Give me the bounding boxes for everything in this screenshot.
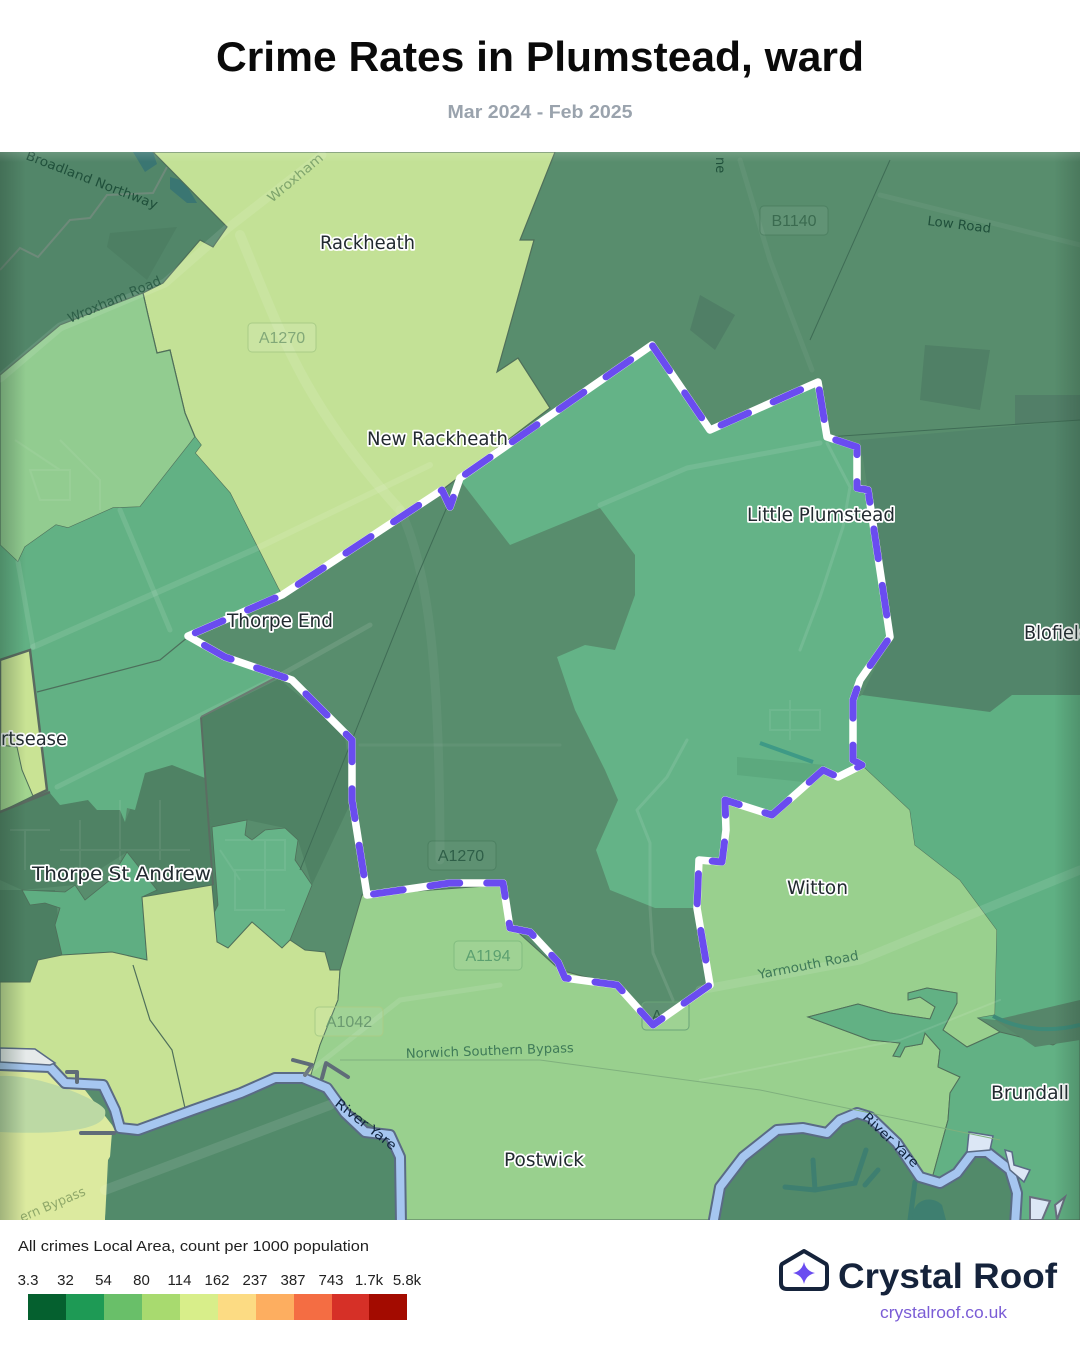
choropleth map: River Yare [332,1096,399,1154]
shield: B1140 [760,206,828,235]
shield: A1194 [454,941,522,970]
choropleth map: Wroxham Road [66,274,164,327]
choropleth map: Norwich Southern Bypass [406,1041,574,1062]
marina [967,1132,993,1152]
region: Rackheath (yellow-green) [143,152,555,595]
marsh channels [785,1150,915,1220]
choropleth map: New Rackheath [367,428,508,450]
legend tick labels: 54 [95,1272,112,1289]
logo: Crystal Roof [781,1251,1057,1322]
choropleth map: Postwick [504,1149,584,1171]
region: Thorpe (mid green) [0,437,282,822]
railway / thin lines [300,160,1080,1140]
region: lime south of river [0,1066,120,1220]
river Yare west and enclosed dark land [105,1132,120,1220]
choropleth map: Wroxham [265,151,327,206]
road labels: Broadland Northway [24,149,160,213]
icon: house with star [781,1251,827,1289]
road shields [248,206,828,1036]
shield: A1194: A1194 [465,948,511,965]
choropleth map: River Yare [859,1110,921,1171]
minor track in north-west [0,167,167,270]
title: Crime Rates in Plumstead, ward [216,33,864,80]
wordmark: Crystal Roof [838,1257,1057,1296]
region: Little Plumstead (mid green) [460,345,890,908]
region: west (light green) [0,293,195,562]
region: Brundall (mid green) [808,988,1080,1220]
legend tick labels: 743 [318,1272,344,1289]
legend tick labels [18,1272,422,1289]
choropleth map: Yarmouth Road [756,949,860,983]
woodland patches on dark areas [0,152,1080,982]
choropleth map: Low Road [927,214,992,237]
road network (faint) [0,155,1080,1190]
region: Witton and Postwick (light green) [310,765,1000,1220]
choropleth map: ern Bypass [18,1184,88,1226]
minor estate streets [10,700,821,911]
patch: Thorpe north [212,820,312,948]
choropleth map: Thorpe St Andrew [31,863,211,885]
region: Thorpe lower lime [0,885,340,1130]
shield: A1270 south: A1270 [438,848,484,865]
shield: A1270 north: A1270 [259,330,305,347]
shield: B1140: B1140 [771,213,817,230]
choropleth map: Witton [787,877,848,899]
choropleth map [0,149,1080,1226]
shield: A47: A [652,1008,663,1025]
region: Hartsease strip [0,650,47,812]
ward boundary: Plumstead [188,345,890,1025]
date range subtitle: Mar 2024 - Feb 2025 [448,101,632,122]
legend [18,1238,422,1320]
region: dark strip east [995,1000,1080,1047]
shield: A1270 north [248,323,316,352]
legend tick labels: 3.3 [18,1272,38,1289]
legend tick labels: 114 [168,1272,191,1289]
legend colour scale [28,1294,407,1320]
shield: A47 [642,1002,689,1030]
parish boundary line [37,637,188,692]
legend tick labels: 1.7k [355,1272,384,1289]
river outline [0,1060,1017,1225]
legend title: All crimes Local Area, count per 1000 population [18,1238,369,1255]
legend tick labels: 32 [57,1272,74,1289]
legend tick labels: 5.8k [393,1272,422,1289]
place labels: Rackheath [320,232,415,254]
shield: A1270 south [428,841,496,870]
choropleth map: ne [712,157,727,173]
shield: A1042: A1042 [326,1014,372,1031]
region: Blofield south (mid green) [853,695,1080,1020]
choropleth map: Brundall [991,1082,1069,1104]
choropleth map: Thorpe End [226,610,333,632]
legend tick labels: 80 [133,1272,150,1289]
map edge vignette [0,152,1080,1220]
legend tick labels: 387 [280,1272,306,1289]
patch: Thorpe south [22,852,157,960]
website url: crystalroof.co.uk [880,1304,1008,1322]
legend tick labels: 162 [204,1272,230,1289]
sandbank [0,1048,55,1065]
choropleth map: rtsease [1,728,67,750]
choropleth map: Little Plumstead [747,504,895,526]
legend tick labels: 237 [242,1272,268,1289]
shield: A1042 [315,1007,383,1036]
